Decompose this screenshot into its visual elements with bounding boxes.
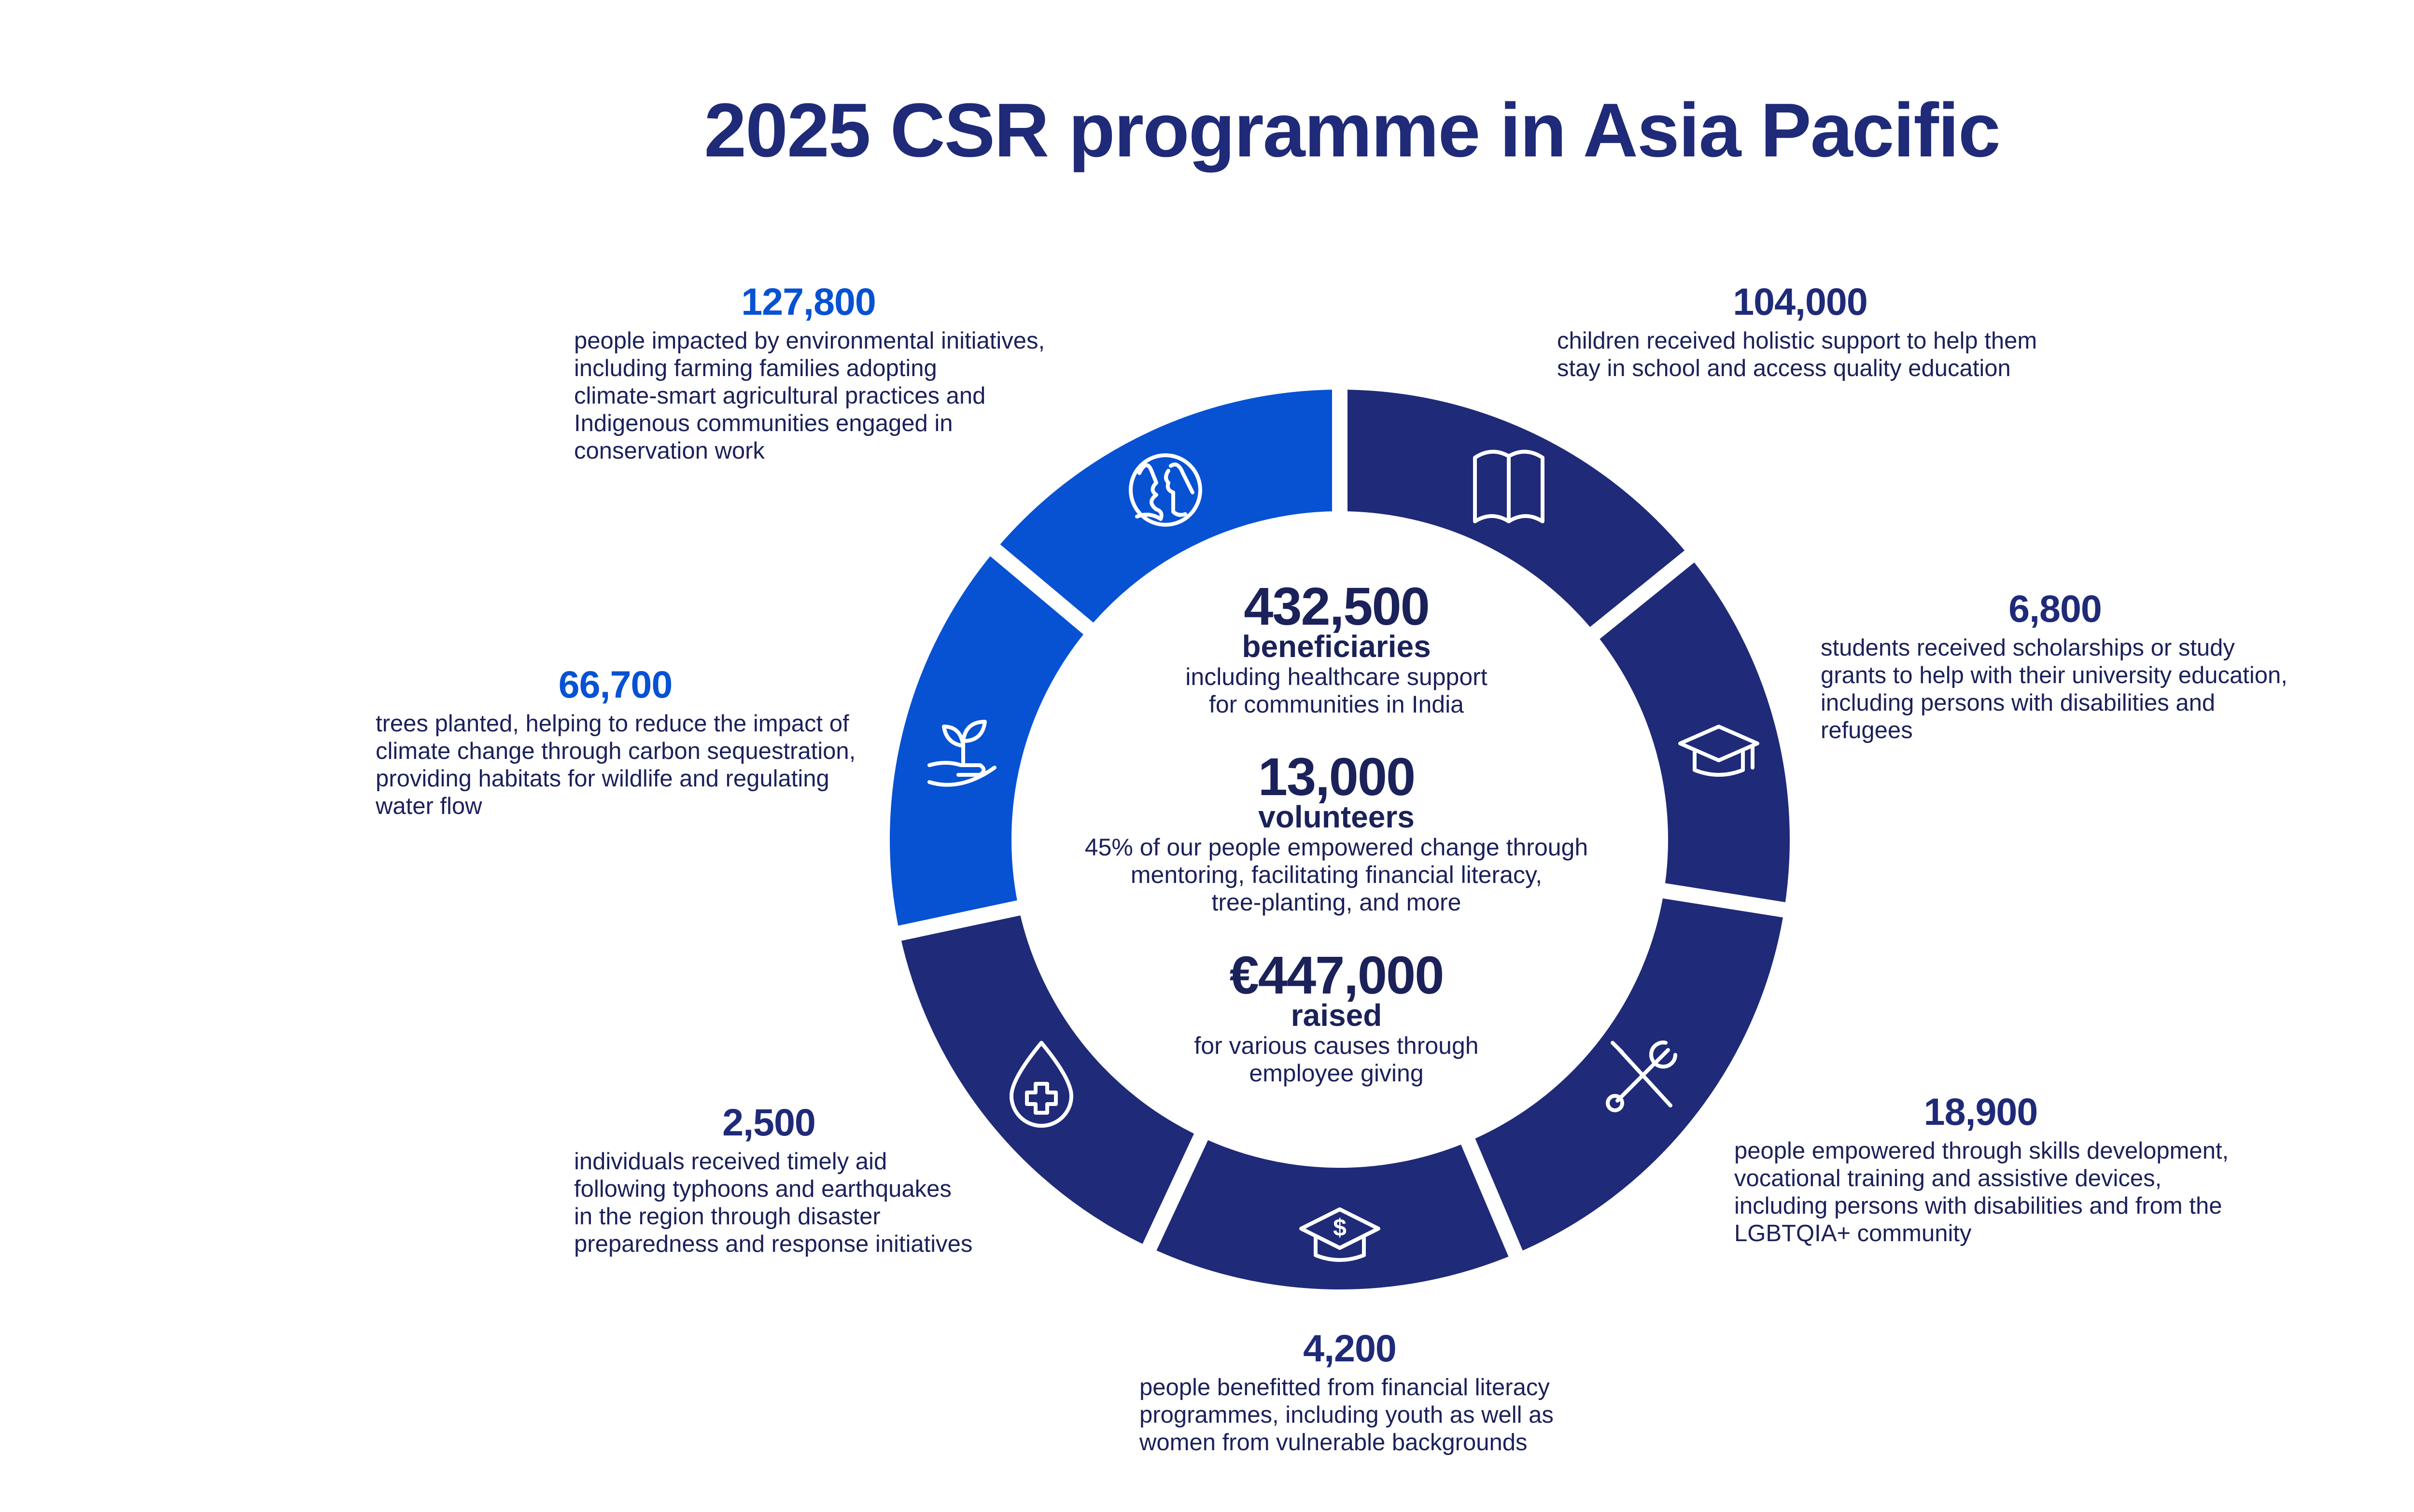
center: raised <box>1194 946 1479 1087</box>
icon: graduation cap <box>1680 727 1757 775</box>
segment: education book <box>1340 450 1642 595</box>
stat: environment: 127,800 <box>741 280 876 323</box>
stat: skills: people empowered through skills development, <box>1734 1138 2229 1164</box>
segment: environment <box>1042 450 1340 589</box>
center: beneficiaries: including healthcare support <box>1185 663 1488 690</box>
stat: scholarships: grants to help with their university education, <box>1821 662 2288 688</box>
center: beneficiaries: for communities in India <box>1209 691 1464 718</box>
stat: environment: including farming families adopting <box>574 355 937 381</box>
center: beneficiaries: beneficiaries <box>1242 629 1431 664</box>
center: volunteers: volunteers <box>1258 799 1415 834</box>
stat: financial literacy: 4,200 <box>1303 1327 1396 1370</box>
icon: plant in hand <box>929 722 995 785</box>
stat: education: 104,000 <box>1733 280 1867 323</box>
stat: scholarships <box>1821 587 2288 743</box>
stat: skills <box>1734 1090 2229 1246</box>
center: beneficiaries <box>1185 577 1488 718</box>
icon: medical drop <box>1011 1043 1071 1126</box>
center: volunteers: tree-planting, and more <box>1212 889 1461 916</box>
stat: environment <box>574 280 1045 464</box>
stat: environment: Indigenous communities engaged in <box>574 410 953 436</box>
center: raised: raised <box>1291 998 1382 1033</box>
stat: skills: LGBTQIA+ community <box>1734 1220 1972 1246</box>
stat: trees: water flow <box>376 793 482 819</box>
center: beneficiaries: 432,500 <box>1244 577 1429 636</box>
stat: trees: climate change through carbon sequestration, <box>376 738 856 764</box>
segment: skills <box>1492 900 1724 1198</box>
stat: financial literacy <box>1139 1327 1554 1456</box>
stat: education: children received holistic support to help them <box>1557 328 2037 354</box>
center: volunteers <box>1085 747 1588 916</box>
stat: disaster aid: individuals received timely aid <box>574 1148 887 1175</box>
stat: environment: people impacted by environmental initiatives, <box>574 328 1045 354</box>
icon: dollar cap <box>1301 1209 1378 1260</box>
center: raised: employee giving <box>1249 1060 1424 1087</box>
stat: trees <box>376 663 856 819</box>
segment: disaster aid <box>959 921 1175 1192</box>
segment: financial literacy <box>1175 1192 1492 1229</box>
icon: globe <box>1131 455 1200 525</box>
stat: scholarships: 6,800 <box>2008 587 2102 630</box>
stat: disaster aid: in the region through disaster <box>574 1204 881 1230</box>
stat: disaster aid: preparedness and response initiatives <box>574 1231 972 1257</box>
stat: scholarships: refugees <box>1821 717 1913 743</box>
stat: disaster aid <box>574 1101 972 1257</box>
stat: skills: vocational training and assistive devices, <box>1734 1165 2161 1191</box>
stat: scholarships: including persons with disabilities and <box>1821 690 2215 716</box>
segment: trees <box>951 589 1042 921</box>
stat: skills: including persons with disabilities and from the <box>1734 1193 2222 1219</box>
stat: trees: providing habitats for wildlife and regulating <box>376 766 829 792</box>
stat: disaster aid: following typhoons and earthquakes <box>574 1176 952 1202</box>
stat: scholarships: students received scholarships or study <box>1821 635 2235 661</box>
stat: trees: 66,700 <box>559 663 672 706</box>
stat: education <box>1557 280 2037 381</box>
stat: trees: trees planted, helping to reduce the impact of <box>376 711 849 737</box>
icon: book <box>1475 452 1543 521</box>
icon: dollar cap: $ <box>1333 1214 1347 1241</box>
center: volunteers: mentoring, facilitating financial literacy, <box>1131 861 1542 888</box>
stat: skills: 18,900 <box>1924 1090 2037 1133</box>
title: 2025 CSR programme in Asia Pacific <box>704 88 2000 173</box>
stat: financial literacy: people benefitted from financial literacy <box>1139 1374 1550 1400</box>
stat: financial literacy: women from vulnerable backgrounds <box>1139 1429 1527 1456</box>
segment: scholarships <box>1642 595 1729 900</box>
stat: education: stay in school and access quality education <box>1557 355 2011 381</box>
stat: disaster aid: 2,500 <box>722 1101 815 1144</box>
stat: financial literacy: programmes, including youth as well as <box>1139 1402 1554 1428</box>
stat: environment: conservation work <box>574 438 765 464</box>
center: raised: for various causes through <box>1194 1032 1479 1059</box>
stat: environment: climate-smart agricultural practices and <box>574 383 985 409</box>
icon: tools <box>1608 1042 1675 1110</box>
center: raised: €447,000 <box>1230 946 1443 1005</box>
center: volunteers: 45% of our people empowered change through <box>1085 834 1588 861</box>
center: volunteers: 13,000 <box>1258 747 1415 807</box>
